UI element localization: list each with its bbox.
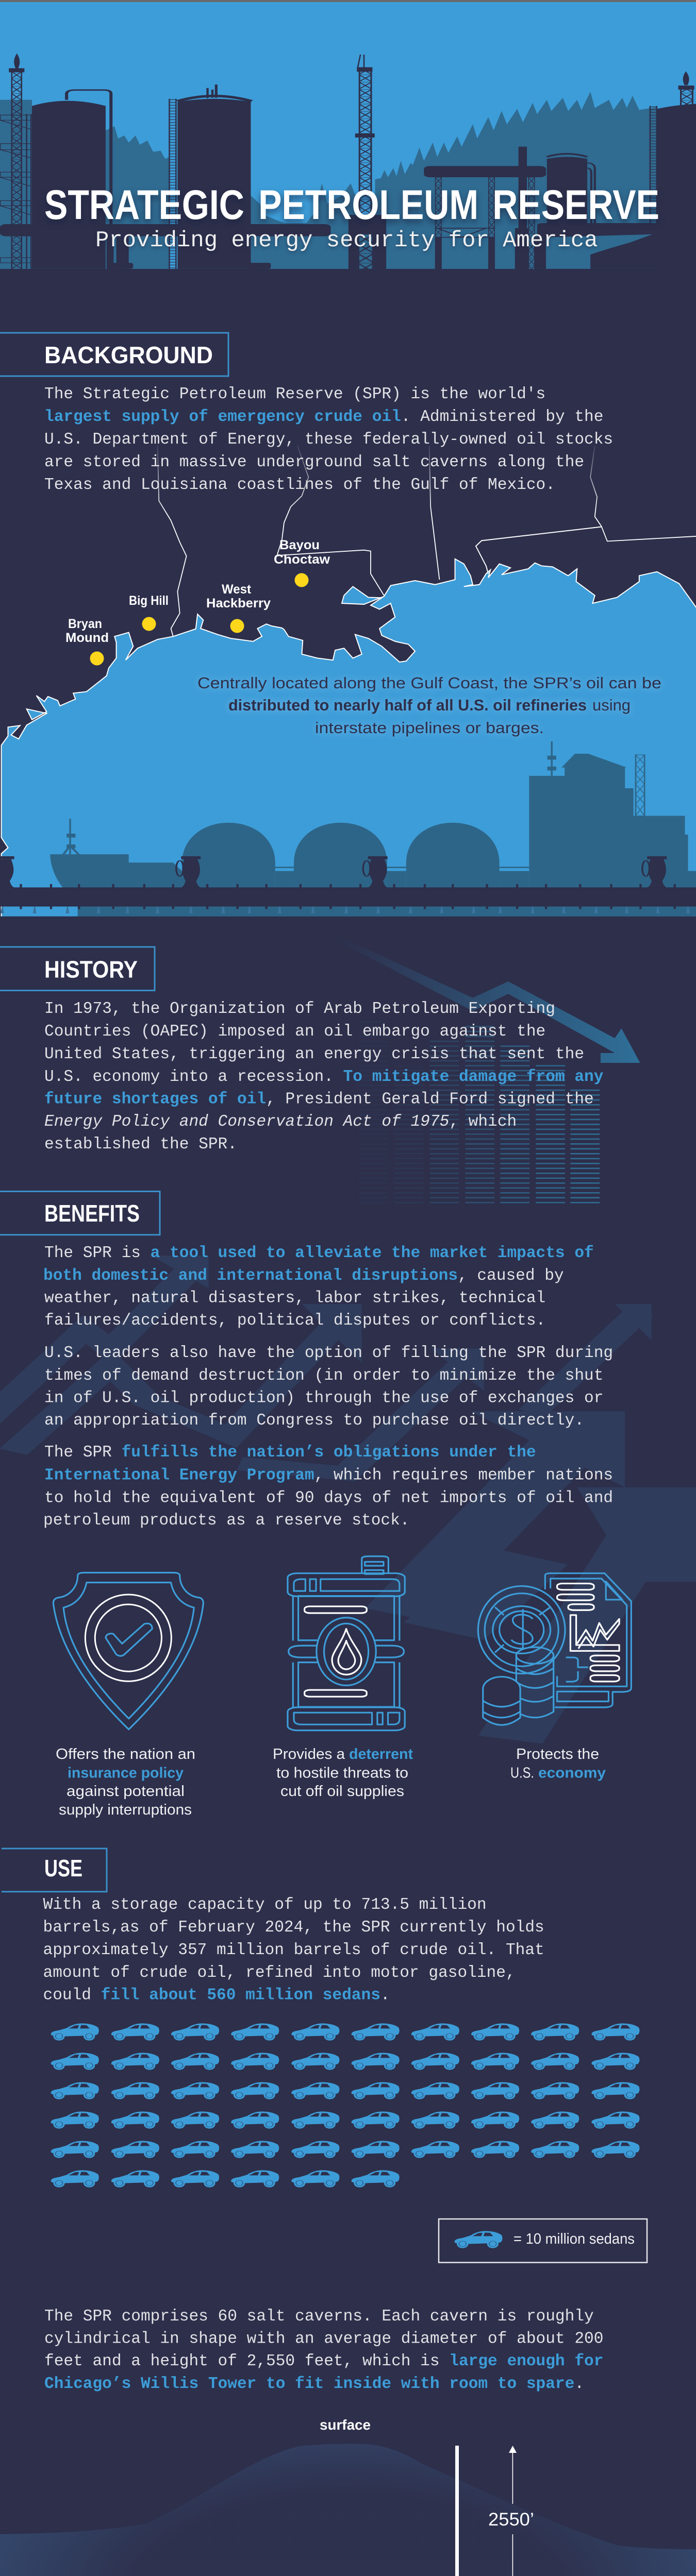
icon: oil barrel bbox=[288, 1556, 405, 1731]
map site markers and labels: Choctaw bbox=[274, 552, 330, 567]
history text: future shortages of oil, President Gerald Ford signed the bbox=[44, 1090, 594, 1109]
caption: insurance policy: Offers the nation an bbox=[56, 1746, 195, 1762]
benefits text: U.S. leaders also have the option of filling the SPR during bbox=[44, 1344, 613, 1362]
gulf coast map bbox=[2, 446, 696, 920]
history text: U.S. economy into a recession. To mitigate damage from any bbox=[44, 1068, 604, 1086]
benefits text: weather, natural disasters, labor strikes, technical bbox=[44, 1289, 545, 1308]
caption: deterrent: deterrent bbox=[349, 1746, 413, 1762]
use text: barrels,as of February 2024, the SPR currently holds bbox=[43, 1919, 544, 1937]
cavern text: feet and a height of 2,550 feet, which is large enough for bbox=[44, 2352, 603, 2370]
subtitle: Providing energy security for America bbox=[95, 228, 598, 253]
benefits text bbox=[43, 1244, 613, 1530]
background section heading: BACKGROUND bbox=[44, 342, 213, 368]
benefits section heading bbox=[0, 1191, 160, 1235]
salt dome and cavern diagram bbox=[0, 2444, 696, 2576]
icon: shield with check bbox=[53, 1573, 203, 1730]
gulf coast callout text: Centrally located along the Gulf Coast, the SPR’s oil can be bbox=[197, 674, 661, 692]
history text: Energy Policy and Conservation Act of 1975, which bbox=[44, 1113, 517, 1131]
caption: economy bbox=[510, 1746, 606, 1782]
cavern text: Chicago’s Willis Tower to fit inside with room to spare. bbox=[44, 2375, 584, 2393]
icon: coins and financial report bbox=[478, 1573, 631, 1725]
history text: established the SPR. bbox=[44, 1136, 237, 1154]
benefits text: to hold the equivalent of 90 days of net imports of oil and bbox=[44, 1489, 613, 1507]
history section heading: HISTORY bbox=[44, 956, 138, 983]
background text: U.S. Department of Energy, these federally-owned oil stocks bbox=[44, 431, 613, 449]
pictogram: 56 cars bbox=[51, 2023, 639, 2188]
map site markers and labels: Hackberry bbox=[206, 596, 271, 611]
refinery and pipeline silhouette bbox=[0, 741, 696, 928]
caption: economy: economy bbox=[538, 1765, 606, 1782]
caption: insurance policy: supply interruptions bbox=[59, 1802, 192, 1818]
gulf coast callout text: using bbox=[592, 696, 631, 714]
history text bbox=[44, 1000, 604, 1154]
caption: deterrent bbox=[273, 1746, 413, 1800]
benefits text: an appropriation from Congress to purchase oil directly. bbox=[44, 1412, 584, 1430]
history section heading bbox=[0, 947, 155, 990]
background section heading bbox=[0, 333, 228, 376]
map site markers and labels: Bayou bbox=[279, 538, 320, 552]
history text: United States, triggering an energy crisis that sent the bbox=[44, 1045, 584, 1063]
map site markers and labels bbox=[65, 538, 330, 666]
benefits text: The SPR fulfills the nation’s obligations under the bbox=[44, 1444, 536, 1462]
use section heading: USE bbox=[44, 1855, 82, 1882]
gulf coast callout text bbox=[197, 674, 661, 737]
cavern text: cylindrical in shape with an average diameter of about 200 bbox=[44, 2330, 603, 2348]
history text: In 1973, the Organization of Arab Petroleum Exporting bbox=[44, 1000, 555, 1018]
depth label 2550: 2550’ bbox=[488, 2510, 534, 2530]
map site markers and labels: West bbox=[222, 582, 252, 597]
use text: amount of crude oil, refined into motor gasoline, bbox=[43, 1964, 516, 1982]
background text: largest supply of emergency crude oil. Administered by the bbox=[44, 408, 603, 426]
cavern text bbox=[44, 2308, 603, 2393]
use text: approximately 357 million barrels of crude oil. That bbox=[43, 1941, 544, 1959]
benefits text: The SPR is a tool used to alleviate the market impacts of bbox=[44, 1244, 594, 1262]
caption: insurance policy: insurance policy bbox=[68, 1765, 184, 1782]
use section heading bbox=[2, 1849, 107, 1892]
benefits section heading: BENEFITS bbox=[44, 1200, 140, 1227]
header illustration: refinery skyline bbox=[0, 0, 696, 271]
caption: deterrent: Provides a bbox=[273, 1746, 345, 1762]
caption: economy: Protects the bbox=[516, 1746, 599, 1762]
caption: deterrent: to hostile threats to bbox=[276, 1765, 408, 1782]
map site markers and labels: Big Hill bbox=[129, 594, 169, 608]
history background: falling arrow and bars bbox=[330, 938, 640, 1204]
benefits text: both domestic and international disruptions, caused by bbox=[43, 1267, 564, 1285]
history text: Countries (OAPEC) imposed an oil embargo against the bbox=[44, 1023, 545, 1041]
caption: insurance policy: against potential bbox=[67, 1783, 185, 1800]
background text: The Strategic Petroleum Reserve (SPR) is the world's bbox=[44, 385, 545, 403]
background text: are stored in massive underground salt caverns along the bbox=[44, 453, 584, 471]
background text bbox=[44, 385, 613, 494]
cavern text: The SPR comprises 60 salt caverns. Each cavern is roughly bbox=[44, 2308, 594, 2326]
benefits text: failures/accidents, political disputes or conflicts. bbox=[44, 1312, 545, 1330]
label: surface: surface bbox=[320, 2417, 371, 2433]
benefits text: petroleum products as a reserve stock. bbox=[43, 1512, 409, 1530]
use text bbox=[43, 1896, 544, 2004]
caption: economy: U.S. bbox=[510, 1765, 534, 1782]
dimension arrows bbox=[492, 2446, 529, 2576]
use text: could fill about 560 million sedans. bbox=[43, 1987, 390, 2004]
map site markers and labels: Bryan bbox=[68, 617, 102, 631]
legend: 10 million sedans bbox=[439, 2219, 647, 2263]
map site markers and labels: Mound bbox=[65, 631, 109, 645]
use text: With a storage capacity of up to 713.5 million bbox=[43, 1896, 487, 1914]
salt dome pipe bbox=[455, 2446, 459, 2576]
benefits text: in of U.S. oil production) through the use of exchanges or bbox=[44, 1389, 603, 1408]
caption: deterrent: cut off oil supplies bbox=[280, 1783, 404, 1800]
caption: insurance policy bbox=[56, 1746, 195, 1818]
benefits background: rising arrows bbox=[0, 1256, 696, 1740]
legend: 10 million sedans: = 10 million sedans bbox=[513, 2231, 635, 2247]
benefits text: times of demand destruction (in order to minimize the shut bbox=[44, 1367, 603, 1385]
gulf coast callout text: distributed to nearly half of all U.S. oil refineries bbox=[228, 696, 587, 714]
background text: Texas and Louisiana coastlines of the Gulf of Mexico. bbox=[44, 476, 555, 494]
gulf coast callout text: interstate pipelines or barges. bbox=[315, 719, 544, 737]
benefits text: International Energy Program, which requires member nations bbox=[44, 1466, 613, 1485]
